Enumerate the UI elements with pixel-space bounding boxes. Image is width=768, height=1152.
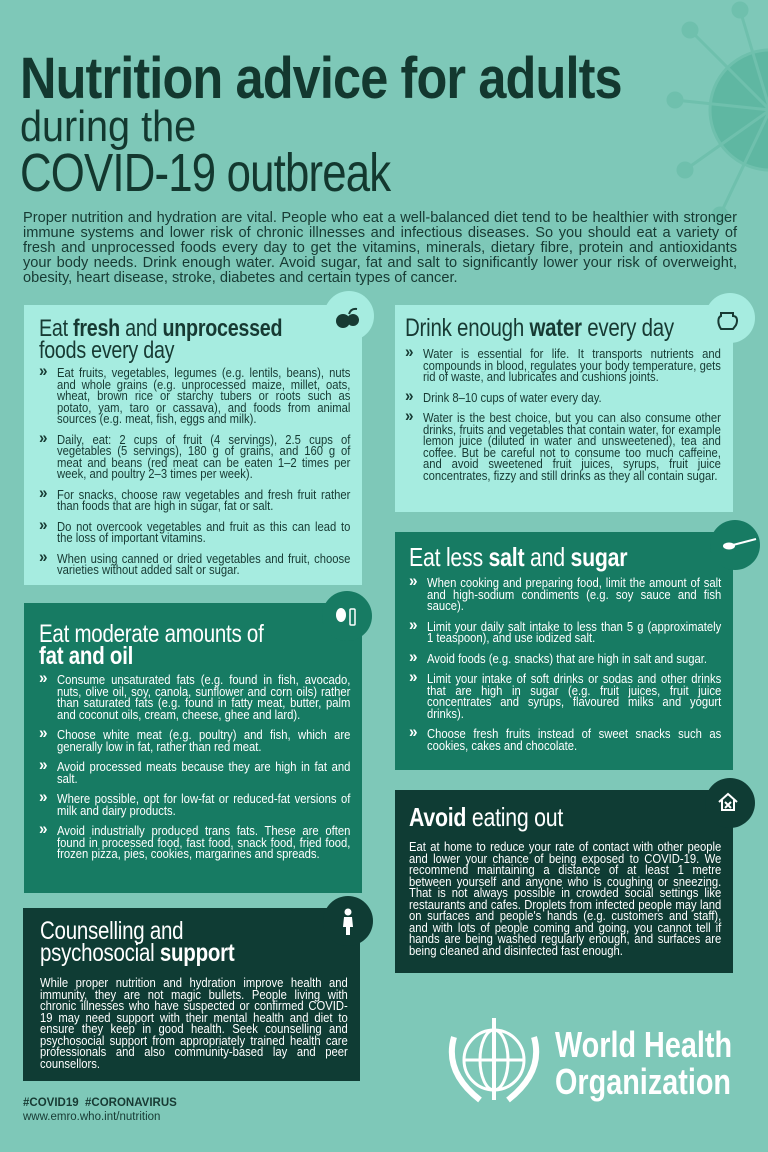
- footer hashtags: [23, 1097, 177, 1123]
- panel: avoid eating out: [395, 790, 733, 973]
- title: [20, 46, 622, 203]
- icon: fruit: [336, 308, 359, 328]
- icon: jug: [717, 312, 738, 330]
- bullets: Drink 8–10 cups of water every day.: [423, 390, 602, 404]
- bullets: When using canned or dried vegetables and fruit, choose varieties without added salt or sugar.: [57, 552, 350, 577]
- heading: [40, 917, 234, 967]
- bullets: [40, 366, 350, 577]
- panel: fat and oil: [24, 603, 362, 893]
- logo: WHO: World Health: [555, 1024, 732, 1065]
- heading: psychosocial support: [40, 939, 234, 967]
- icon: fish and bottle: [336, 608, 356, 626]
- bullets: Do not overcook vegetables and fruit as this can lead to the loss of important vitamins.: [57, 520, 350, 545]
- panel: salt and sugar: [395, 532, 733, 770]
- bullets: Limit your intake of soft drinks or sodas and other drinks that are high in sugar (e.g. fruit juices, fruit juice concentrates and syrups, flavoured milks and yogurt drinks).: [427, 672, 721, 720]
- title: during the: [20, 102, 196, 151]
- bullets: Avoid foods (e.g. snacks) that are high in salt and sugar.: [427, 652, 707, 666]
- heading: [39, 315, 282, 364]
- bullets: Water is essential for life. It transports nutrients and compounds in blood, regulates your body temperature, gets rid of waste, and lubricates and cushions joints.: [423, 347, 721, 384]
- heading: [39, 620, 264, 670]
- logo: WHO: Organization: [555, 1061, 731, 1102]
- bullets: For snacks, choose raw vegetables and fresh fruit rather than foods that are high in sugar, fat or salt.: [57, 488, 350, 513]
- bullets: Water is the best choice, but you can also consume other drinks, fruits and vegetables that contain water, for example lemon juice (diluted in water and unsweetened), tea and coffee. But be careful not to consume too much caffeine, and avoid sweetened fruit juices, syrups, fruit juice concentrates, fizzy and still drinks as they all contain sugar.: [423, 411, 721, 482]
- bullets: [406, 347, 721, 482]
- icon: house: [718, 792, 738, 811]
- heading: Eat less salt and sugar: [409, 542, 627, 572]
- logo: WHO: [448, 1018, 732, 1102]
- bullets: Where possible, opt for low-fat or reduced-fat versions of milk and dairy products.: [57, 792, 350, 818]
- bullets: Choose white meat (e.g. poultry) and fish, which are generally low in fat, rather than red meat.: [57, 728, 350, 754]
- heading: fat and oil: [39, 642, 133, 670]
- heading: Drink enough water every day: [405, 314, 674, 342]
- icon: virus: [666, 2, 768, 224]
- bullets: Avoid processed meats because they are high in fat and salt.: [57, 760, 350, 786]
- bullets: Choose fresh fruits instead of sweet snacks such as cookies, cakes and chocolate.: [427, 727, 721, 752]
- title: COVID-19 outbreak: [20, 143, 390, 203]
- bullets: [410, 576, 722, 752]
- bullets: [40, 673, 350, 861]
- bullets: Avoid industrially produced trans fats. These are often found in processed food, fast food, snack food, fried food, frozen pizza, pies, cookies, margarines and spreads.: [57, 824, 350, 861]
- bullets: When cooking and preparing food, limit the amount of salt and high-sodium condiments (e.g. soy sauce and fish sauce).: [427, 576, 721, 613]
- bullets: Eat fruits, vegetables, legumes (e.g. lentils, beans), nuts and whole grains (e.g. unprocessed maize, millet, oats, wheat, brown rice or starchy tubers or roots such as potato, yam, taro or cassava), and foods from animal sources (e.g. meat, fish, eggs and milk).: [57, 366, 350, 426]
- panel: fresh foods: [24, 305, 362, 585]
- icon: spoon: [723, 538, 756, 550]
- bullets: Consume unsaturated fats (e.g. found in fish, avocado, nuts, olive oil, soy, canola, sunflower and corn oils) rather than saturated fats (e.g. found in fatty meat, butter, palm and coconut oils, cream, cheese, ghee and lard).: [57, 673, 350, 722]
- heading: Counselling and: [40, 917, 183, 945]
- bullets: Daily, eat: 2 cups of fruit (4 servings), 2.5 cups of vegetables (5 servings), 180 g of grains, and 160 g of meat and beans (red meat can be eaten 1–2 times per week, and poultry 2–3 times per week).: [57, 432, 350, 481]
- footer hashtags: www.emro.who.int/nutrition: [23, 1111, 160, 1123]
- heading: Eat fresh and unprocessed: [39, 315, 282, 342]
- body text: While proper nutrition and hydration improve health and immunity, they are not magic bullets. People living with chronic illnesses who have suspected or confirmed COVID-19 may need support with their mental health and diet to ensure they keep in good health. Seek counselling and psychosocial support from appropriately trained health care professionals and also community-based lay and peer counsellors.: [40, 976, 348, 1070]
- title: Nutrition advice for adults: [20, 46, 622, 111]
- panel: water: [395, 305, 733, 512]
- heading: Avoid eating out: [409, 802, 563, 832]
- footer hashtags: #COVID19 #CORONAVIRUS: [23, 1097, 177, 1109]
- intro text: Proper nutrition and hydration are vital. People who eat a well-balanced diet tend to be healthier with stronger immune systems and lower risk of chronic illnesses and infectious diseases. So you should eat a variety of fresh and unprocessed foods every day to get the vitamins, minerals, dietary fibre, protein and antioxidants your body needs. Drink enough water. Avoid sugar, fat and salt to significantly lower your risk of overweight, obesity, heart disease, stroke, diabetes and certain types of cancer.: [23, 210, 737, 286]
- body text: Eat at home to reduce your rate of contact with other people and lower your chance of being exposed to COVID-19. We recommend maintaining a distance of at least 1 metre between yourself and anyone who is coughing or sneezing. That is not always possible in crowded social settings like restaurants and cafes. Droplets from infected people may land on surfaces and people's hands (e.g. customers and staff), and with lots of people coming and going, you cannot tell if hands are being washed regularly enough, and surfaces are being cleaned and disinfected fast enough.: [409, 840, 721, 958]
- heading: foods every day: [39, 337, 174, 364]
- bullets: Limit your daily salt intake to less than 5 g (approximately 1 teaspoon), and use iodized salt.: [427, 620, 721, 645]
- panel: counselling: [23, 908, 360, 1081]
- icon: person: [343, 908, 353, 935]
- heading: Eat moderate amounts of: [39, 620, 264, 648]
